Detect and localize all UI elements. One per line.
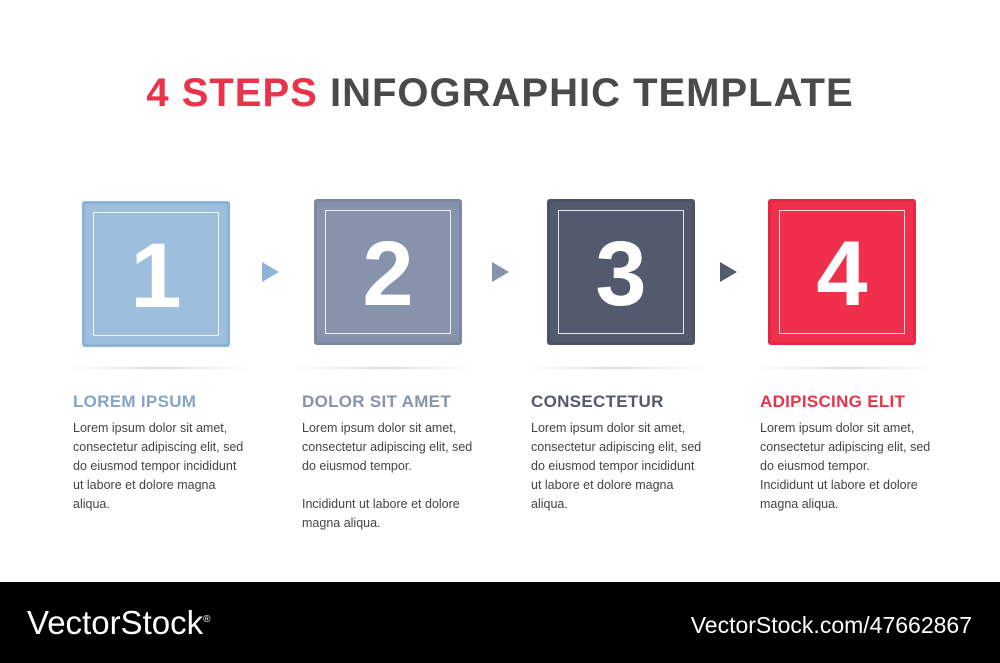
- text 3: [531, 421, 701, 511]
- text 2: [302, 421, 472, 530]
- footer url: VectorStock.com/47662867: [691, 612, 972, 638]
- text 4: Lorem ipsum dolor sit amet,: [760, 421, 914, 435]
- text 3: ut labore et dolore magna: [531, 478, 673, 492]
- heading 1: LOREM IPSUM: [73, 392, 196, 411]
- text 1: ut labore et dolore magna: [73, 478, 215, 492]
- text 1: Lorem ipsum dolor sit amet,: [73, 421, 227, 435]
- step 3 box: [547, 199, 695, 345]
- step 2 box: [314, 199, 462, 345]
- text 1: consectetur adipiscing elit, sed: [73, 440, 243, 454]
- text 3: do eiusmod tempor incididunt: [531, 459, 694, 473]
- step 4 box: 4: [816, 223, 868, 325]
- step 2 box: 2: [362, 223, 414, 325]
- text 1: do eiusmod tempor incididunt: [73, 459, 236, 473]
- step 3 box: 3: [595, 223, 647, 325]
- step 1 box: 1: [130, 225, 182, 327]
- text 4: [760, 421, 930, 511]
- step 1 box: [82, 201, 230, 347]
- text 4: Incididunt ut labore et dolore: [760, 478, 918, 492]
- arrow 3: [720, 262, 737, 282]
- footer brand: VectorStock®: [27, 604, 210, 641]
- text 2: consectetur adipiscing elit, sed: [302, 440, 472, 454]
- text 2: Lorem ipsum dolor sit amet,: [302, 421, 456, 435]
- arrow 2: [492, 262, 509, 282]
- text 4: consectetur adipiscing elit, sed: [760, 440, 930, 454]
- text 1: [73, 421, 243, 511]
- text 1: aliqua.: [73, 497, 110, 511]
- footer bar: [0, 582, 1000, 663]
- text 3: aliqua.: [531, 497, 568, 511]
- title: 4 STEPS INFOGRAPHIC TEMPLATE: [146, 71, 854, 115]
- text 2: do eiusmod tempor.: [302, 459, 412, 473]
- text 3: Lorem ipsum dolor sit amet,: [531, 421, 685, 435]
- step 4 box: [768, 199, 916, 345]
- heading 3: CONSECTETUR: [531, 392, 664, 411]
- text 4: do eiusmod tempor.: [760, 459, 870, 473]
- text 4: magna aliqua.: [760, 497, 839, 511]
- heading 4: ADIPISCING ELIT: [760, 392, 905, 411]
- text 3: consectetur adipiscing elit, sed: [531, 440, 701, 454]
- heading 2: DOLOR SIT AMET: [302, 392, 451, 411]
- text 2: Incididunt ut labore et dolore: [302, 497, 460, 511]
- arrow 1: [262, 262, 279, 282]
- text 2: magna aliqua.: [302, 516, 381, 530]
